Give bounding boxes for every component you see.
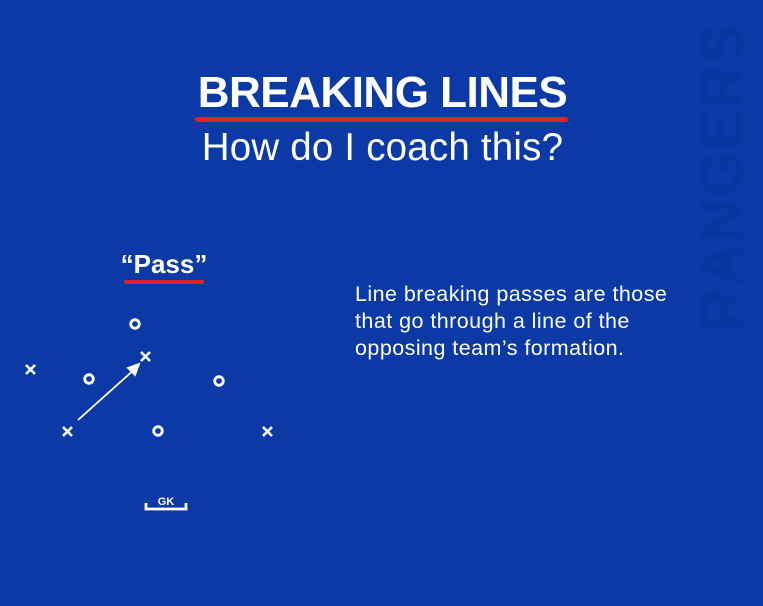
opponents circles (85, 320, 223, 435)
goal GK (146, 496, 186, 509)
pass underline (124, 280, 204, 284)
title: BREAKING LINES (198, 68, 567, 117)
heading: Pass: “Pass” (121, 249, 207, 279)
watermark: RANGERS: RANGERS (688, 23, 755, 331)
diagram (25, 318, 273, 510)
subtitle: How do I coach this? (202, 126, 563, 169)
description text: Line breaking passes are those that go through a line of the opposing team’s formation. (355, 282, 667, 360)
arrow: pass (78, 364, 139, 420)
goal GK: GK (158, 496, 174, 508)
title underline (195, 117, 568, 122)
players crosses (26, 352, 272, 436)
